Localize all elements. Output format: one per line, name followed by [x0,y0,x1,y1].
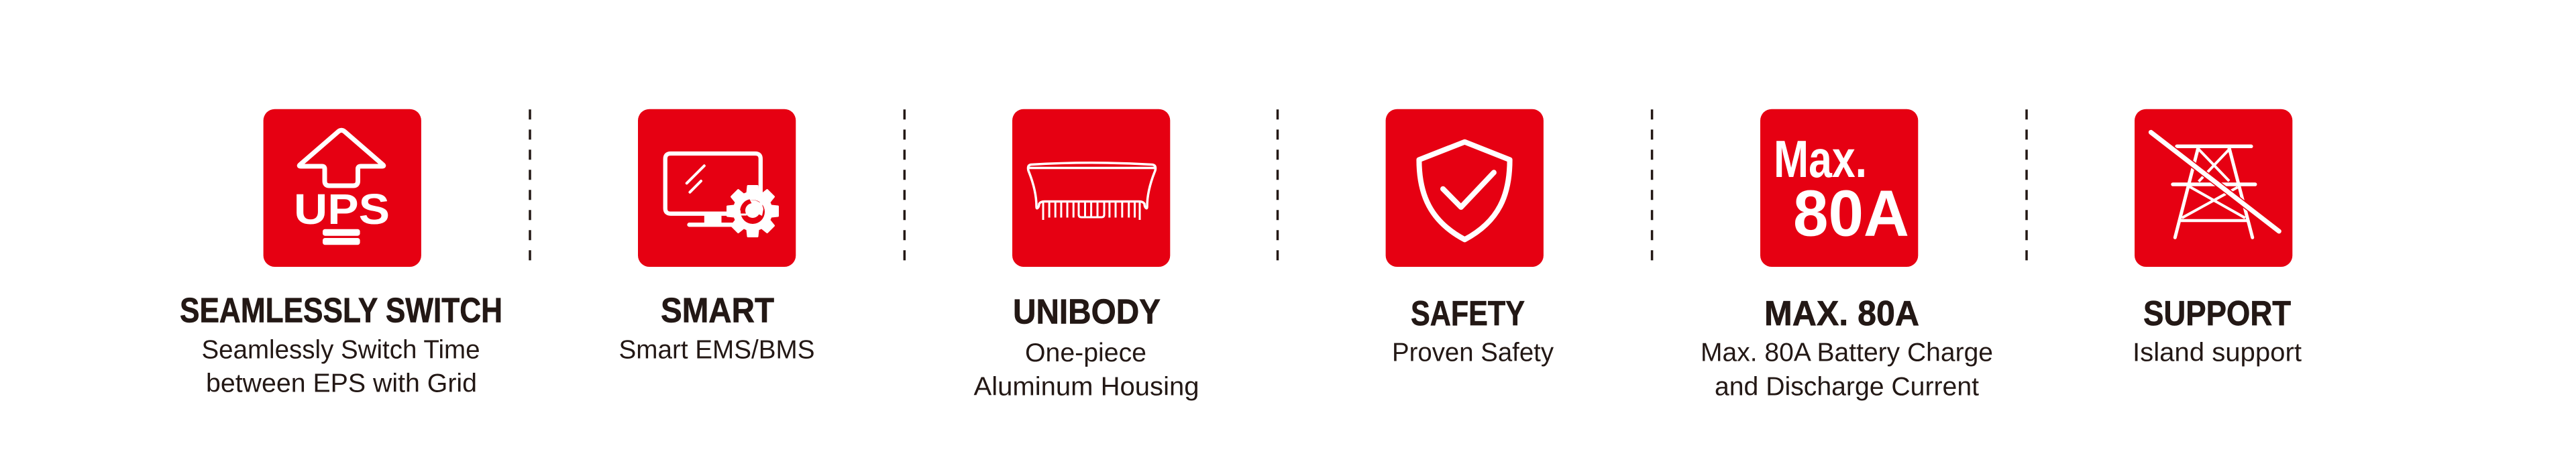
icon tile: UPS arrow: UPS [294,185,390,233]
panel: max 80A [1701,109,1993,401]
icon tile: UPS arrow [264,109,421,267]
panel: safety [1386,109,1554,367]
description: max 80A: Max. 80A Battery Charge [1701,338,1993,367]
heading: safety: SAFETY [1411,294,1525,333]
description: unibody: One-piece [1025,339,1146,367]
icon tile: monitor with gear [638,109,796,267]
icon tile: Max. 80A: 80A [1793,177,1909,250]
panel: support [2133,109,2302,367]
description: safety: Proven Safety [1392,338,1554,367]
heading: support: SUPPORT [2143,294,2291,333]
panel: smart [619,109,814,364]
description: support: Island support [2133,338,2302,367]
icon tile: aluminum housing [1012,109,1170,267]
icon tile: shield check [1386,109,1544,267]
heading: smart: SMART [661,292,774,331]
description: seamlessly switch: Seamlessly Switch Time [201,335,480,364]
icon tile: Max. 80A: Max. [1774,129,1867,188]
description: seamlessly switch [201,335,480,398]
description: max 80A [1701,338,1993,401]
description: smart: Smart EMS/BMS [619,335,814,364]
description: seamlessly switch: between EPS with Grid [206,369,477,398]
description: unibody [974,339,1199,401]
heading: seamlessly switch: SEAMLESSLY SWITCH [180,292,502,331]
icon tile: crossed-out pylon [2135,109,2292,267]
description: max 80A: and Discharge Current [1715,372,1979,401]
panel: unibody [974,109,1199,401]
heading: unibody: UNIBODY [1013,293,1161,332]
icon tile: Max. 80A [1760,109,1918,267]
heading: max 80A: MAX. 80A [1764,294,1919,333]
panel: seamlessly switch [180,109,502,398]
description: unibody: Aluminum Housing [974,372,1199,401]
